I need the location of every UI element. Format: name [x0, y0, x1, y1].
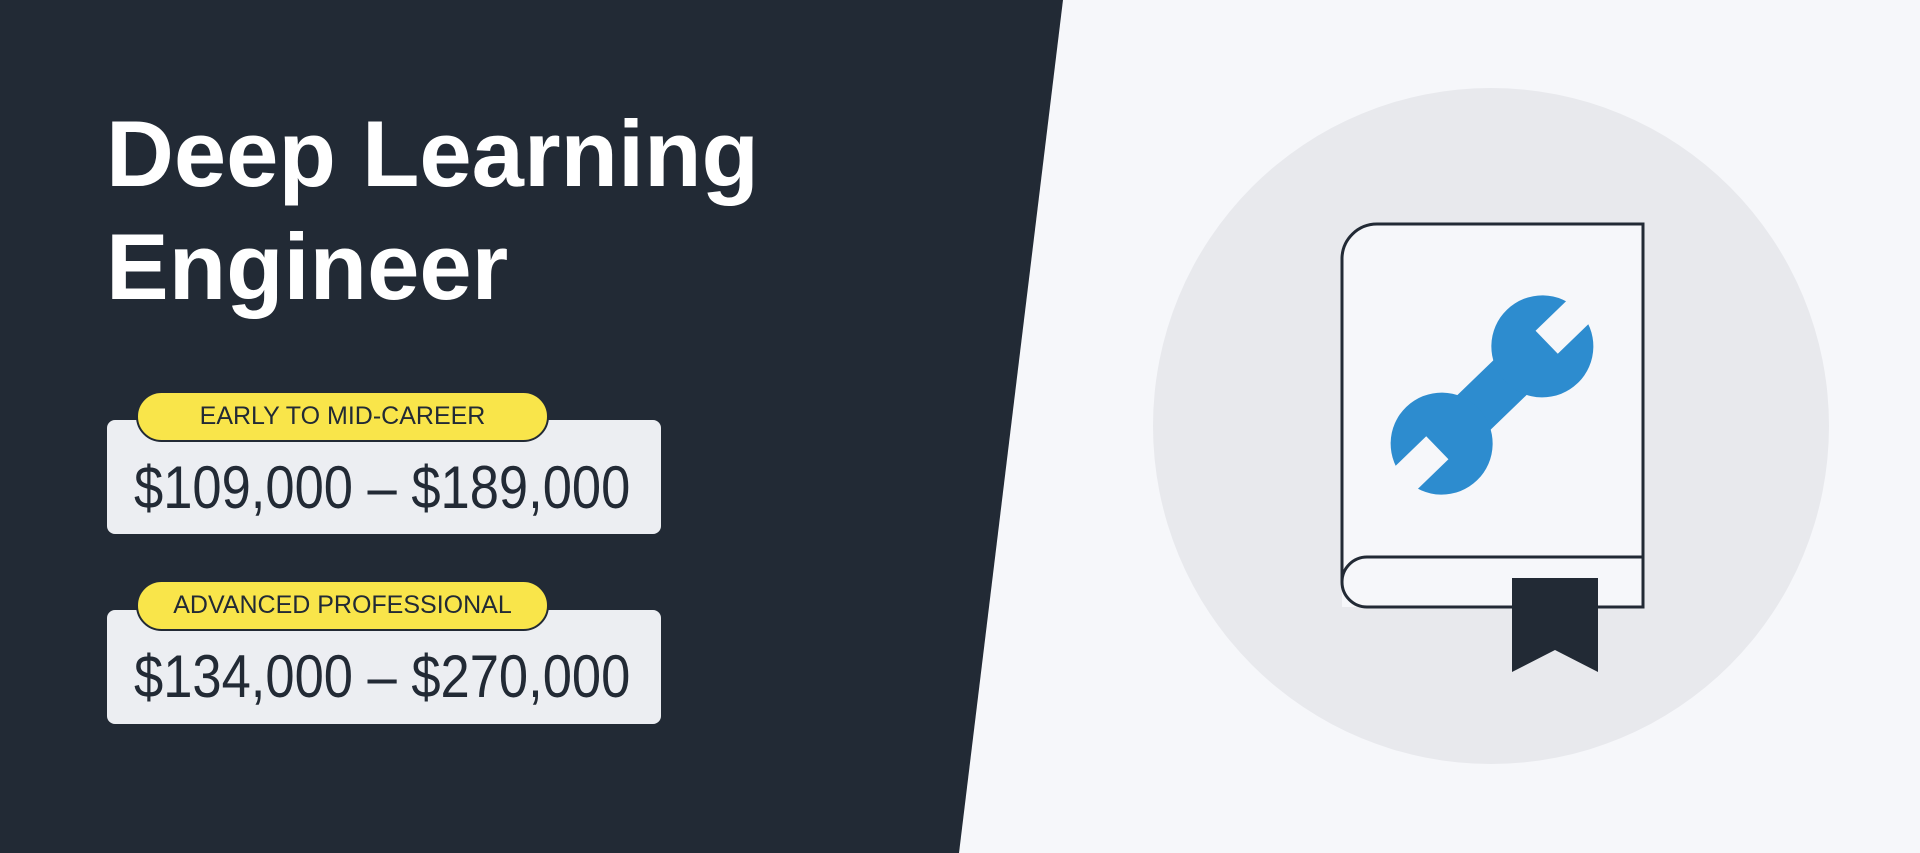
pill: early to mid-career: EARLY TO MID-CAREER [200, 402, 485, 430]
card: advanced [107, 610, 661, 724]
pill: advanced professional: ADVANCED PROFESSIONAL [173, 591, 512, 619]
card: early career [107, 420, 661, 534]
title: Deep Learning [106, 101, 759, 206]
title [106, 101, 759, 319]
pill: early to mid-career [136, 391, 549, 442]
salary advanced: $134,000 – $270,000 [134, 643, 630, 710]
pill: advanced professional [136, 580, 549, 631]
title: Engineer [106, 214, 508, 319]
salary early: $109,000 – $189,000 [134, 454, 630, 521]
